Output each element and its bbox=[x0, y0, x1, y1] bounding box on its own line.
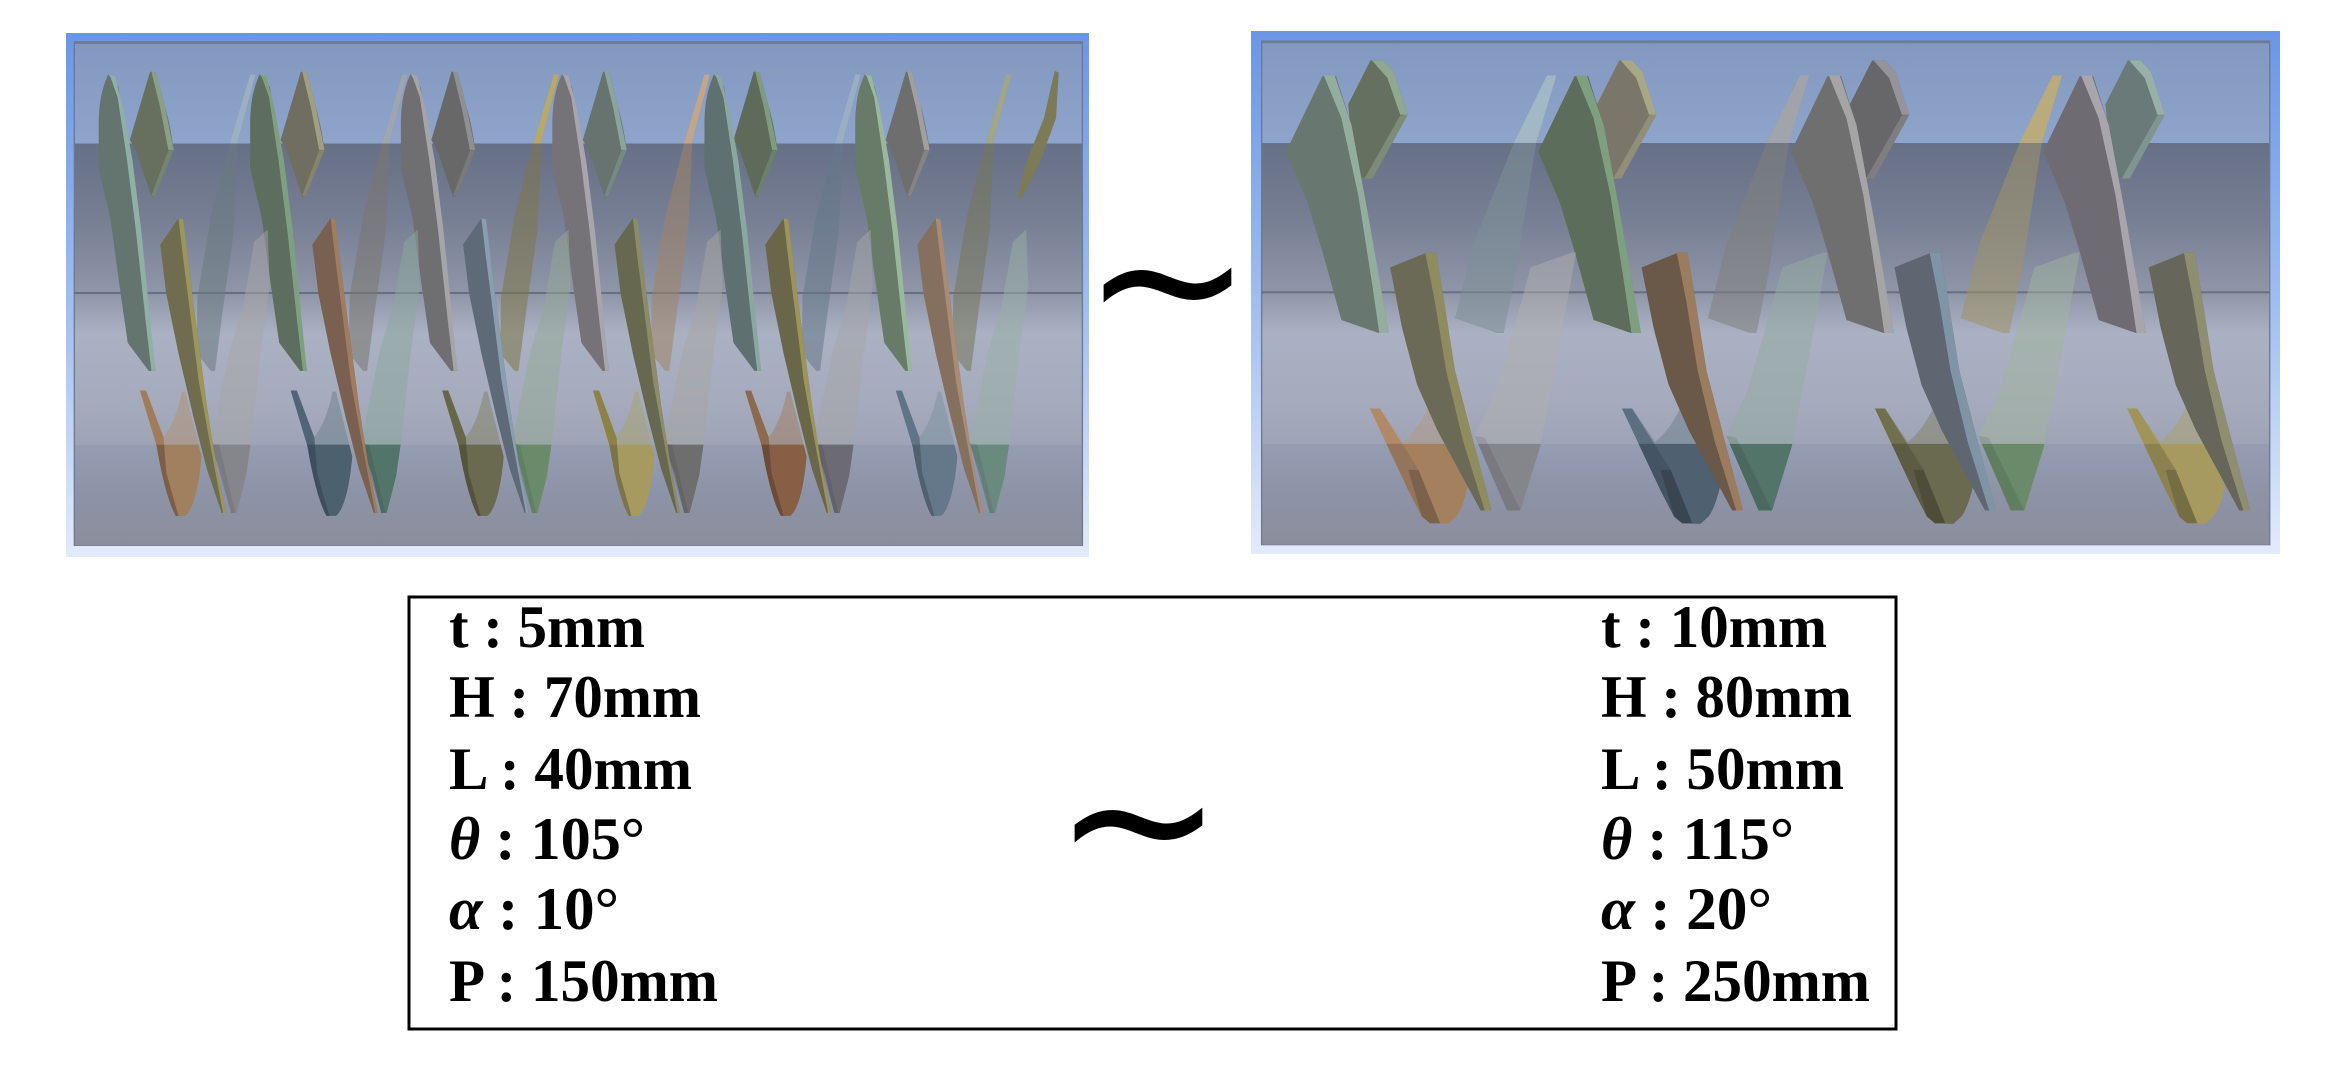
panel frame bbox=[66, 33, 1089, 557]
cylinder background bbox=[74, 42, 1082, 546]
row: translucent mid blades bbox=[211, 229, 1028, 513]
column: lower bound values: L : 40mm bbox=[449, 736, 692, 802]
row: translucent back blades bbox=[197, 74, 1011, 371]
column: upper bound values: H : 80mm bbox=[1601, 664, 1852, 730]
row: bottom blades bbox=[1370, 408, 2225, 524]
row: long front blades bbox=[99, 74, 912, 371]
row: mid front blades bbox=[1390, 253, 2250, 511]
column: lower bound values: P : 150mm bbox=[449, 948, 718, 1014]
row: bottom blades bbox=[140, 391, 957, 516]
parameter box bbox=[409, 594, 1896, 1029]
column: upper bound values: L : 50mm bbox=[1601, 736, 1844, 802]
row: pale tips of back blades bbox=[230, 74, 1012, 144]
column: upper bound values: α : 20° bbox=[1601, 876, 1772, 942]
column: lower bound values: θ : 105° bbox=[449, 806, 645, 872]
column: upper bound values: θ : 115° bbox=[1601, 806, 1794, 872]
column: upper bound values: t : 10mm bbox=[1601, 594, 1827, 660]
panel frame bbox=[1251, 31, 2280, 554]
cylinder background bbox=[1262, 41, 2270, 545]
column: lower bound values bbox=[449, 594, 718, 1014]
row: translucent mid blades bbox=[1475, 253, 2080, 511]
column: upper bound values: P : 250mm bbox=[1601, 948, 1870, 1014]
panel: fine blade model bbox=[66, 33, 1089, 557]
box border bbox=[409, 597, 1896, 1029]
tilde between models: ~ bbox=[1082, 161, 1253, 398]
row: back top blades bbox=[1348, 60, 2165, 179]
column: lower bound values: H : 70mm bbox=[449, 664, 701, 730]
row: long front blades bbox=[1286, 75, 2146, 333]
column: upper bound values bbox=[1601, 594, 1870, 1014]
row: short diamond blades bbox=[130, 71, 1059, 197]
row: mid front blades bbox=[160, 218, 983, 513]
row: pale tips of back blades bbox=[1455, 75, 2062, 333]
row: translucent back blades bbox=[1455, 75, 2062, 333]
column: lower bound values: α : 10° bbox=[449, 876, 619, 942]
panel: coarse blade model bbox=[1251, 31, 2280, 554]
column: lower bound values: t : 5mm bbox=[449, 594, 645, 660]
tilde: ~ bbox=[1053, 701, 1224, 938]
